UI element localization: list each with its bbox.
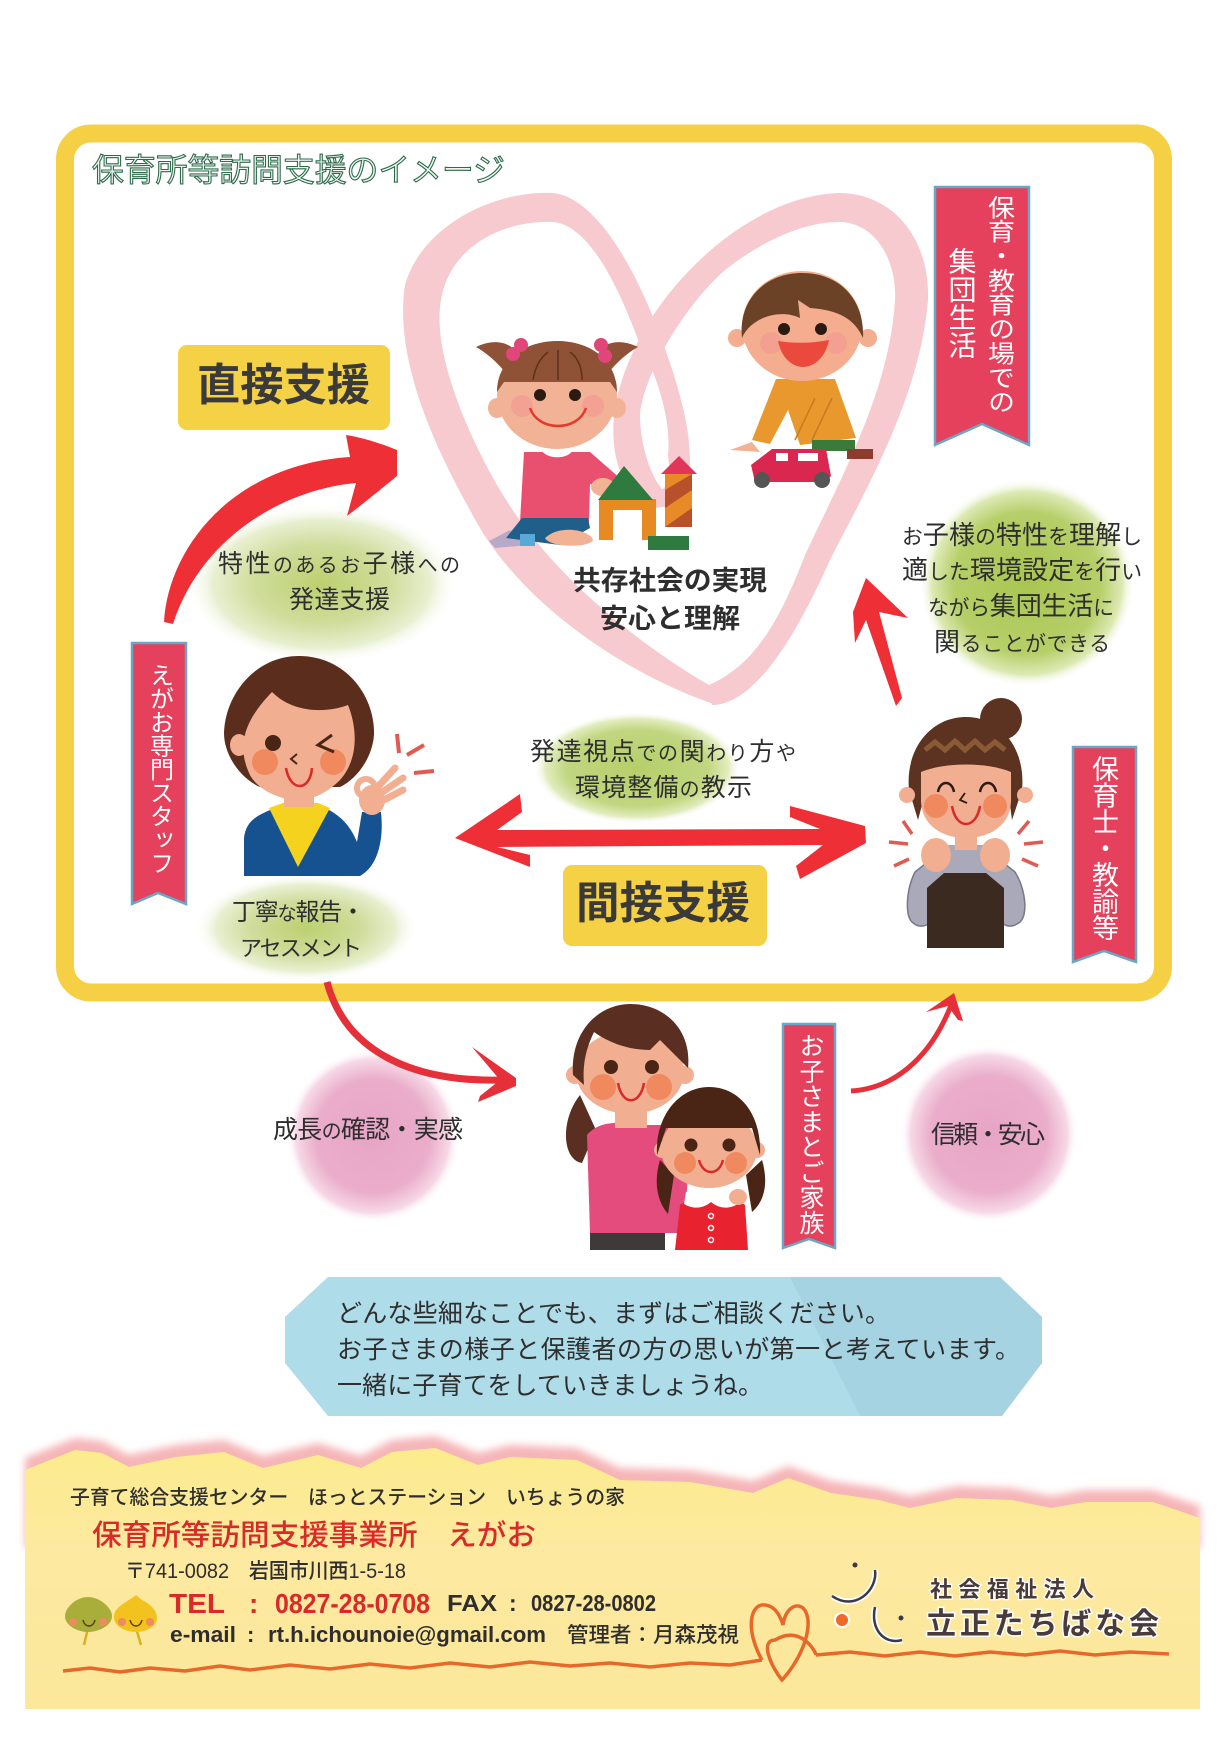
text: report and assessment xyxy=(232,899,365,961)
text: telephone: TEL xyxy=(169,1588,225,1619)
blob: report and assessment xyxy=(194,874,418,982)
blob: trust and relief xyxy=(900,1045,1078,1223)
text: teaching guidance xyxy=(530,738,796,802)
ribbon: child and family xyxy=(783,1024,835,1248)
text: understanding traits: 適した環境設定を行い xyxy=(902,555,1142,585)
text: teaching guidance: 発達視点での関わり方や xyxy=(530,738,796,766)
text: fax: FAX xyxy=(447,1590,498,1616)
text: understanding traits: ながら集団生活に xyxy=(928,591,1114,621)
icon: ginkgo leaf characters xyxy=(65,1595,157,1645)
panel: support image frame xyxy=(65,134,1163,992)
text: office name: 保育所等訪問支援事業所 えがお xyxy=(92,1519,536,1552)
icon: boy with toy car xyxy=(728,271,877,488)
ribbon: egao staff: えがお専門スタッフ xyxy=(146,663,172,875)
decorative cord with heart knot xyxy=(63,1605,1169,1680)
text: teaching guidance: 環境整備の教示 xyxy=(575,774,752,802)
label box: indirect support: 間接支援 xyxy=(576,879,750,928)
text: telephone: 0827-28-0708 xyxy=(275,1588,430,1619)
text: address: 〒741-0082 岩国市川西1-5-18 xyxy=(125,1560,406,1583)
text: center name: 子育て総合支援センター ほっとステーション いちょうの家 xyxy=(70,1486,625,1509)
text: growth confirmation: 成長の確認・実感 xyxy=(273,1116,463,1144)
arrow: two-way indirect support xyxy=(455,794,866,879)
text: fax: 0827-28-0802 xyxy=(531,1590,656,1616)
label box: indirect support xyxy=(563,865,767,946)
ribbon: group life: 集団生活 xyxy=(946,247,976,359)
icon: toy blocks xyxy=(598,456,697,550)
blob: growth confirmation xyxy=(286,1049,460,1223)
callout: consultation message: 一緒に子育てをしていきましょうね。 xyxy=(337,1372,763,1400)
text: fax: : xyxy=(509,1590,517,1616)
panel: footer xyxy=(25,1436,1200,1709)
text: understanding traits: お子様の特性を理解し xyxy=(902,520,1142,550)
text: email: : xyxy=(247,1622,254,1647)
icon: girl playing with blocks xyxy=(476,338,638,548)
icon: mother and daughter xyxy=(566,1004,765,1250)
text: manager: 管理者：月森茂視 xyxy=(567,1624,739,1647)
text: email: e-mail xyxy=(170,1622,236,1647)
arrow: family to teacher xyxy=(851,993,963,1091)
callout: consultation message: どんな些細なことでも、まずはご相談ください。 xyxy=(337,1300,890,1328)
text: developmental support: 発達支援 xyxy=(289,586,390,614)
text: understanding traits: 関ることができる xyxy=(934,627,1110,657)
label box: direct support xyxy=(178,345,390,430)
text: telephone: : xyxy=(249,1588,258,1619)
logo text: corporation name: 立正たちばな会 xyxy=(926,1608,1159,1641)
blob: understanding traits xyxy=(919,479,1135,687)
text: coexistence: 共存社会の実現 xyxy=(573,566,767,596)
ribbon: nursery teachers: 保育士・教諭等 xyxy=(1088,755,1118,941)
blob: teaching guidance xyxy=(533,712,741,824)
arrow: to heart from teacher xyxy=(853,578,908,706)
arrow: staff to children xyxy=(164,435,397,624)
text: report and assessment: アセスメント xyxy=(240,936,362,961)
text: trust and relief: 信頼・安心 xyxy=(931,1121,1045,1149)
logo text: corporation type: 社会福祉法人 xyxy=(930,1577,1094,1602)
ribbon: group life xyxy=(935,187,1029,445)
text: telephone xyxy=(169,1588,430,1619)
text: report and assessment: 丁寧な報告・ xyxy=(232,899,365,926)
text: developmental support: 特性のあるお子様への xyxy=(218,550,460,578)
ribbon: group life: 保育・教育の場での xyxy=(984,195,1014,414)
callout: consultation message xyxy=(285,1277,1042,1416)
icon: staff woman xyxy=(224,656,434,876)
label box: direct support: 直接支援 xyxy=(197,361,370,410)
text: coexistence: 安心と理解 xyxy=(600,604,740,634)
text: developmental support xyxy=(218,550,460,614)
ribbon: egao staff xyxy=(132,643,186,904)
icon: teacher with apron xyxy=(889,698,1043,948)
text: coexistence xyxy=(573,566,767,634)
callout: consultation message: お子さまの様子と保護者の方の思いが第一と考えています。 xyxy=(337,1336,1020,1364)
title: 保育所等訪問支援のイメージ xyxy=(92,152,505,188)
text: email: rt.h.ichounoie@gmail.com xyxy=(268,1622,546,1647)
arrow: staff to family xyxy=(327,982,516,1102)
ribbon: nursery teachers xyxy=(1073,747,1136,962)
blob: developmental support xyxy=(186,504,458,664)
logo: smiling face mark xyxy=(832,1562,904,1641)
ribbon: child and family: お子さまとご家族 xyxy=(796,1033,824,1235)
text: understanding traits xyxy=(902,520,1142,657)
text: fax xyxy=(447,1590,656,1616)
heart ribbon xyxy=(403,193,928,705)
